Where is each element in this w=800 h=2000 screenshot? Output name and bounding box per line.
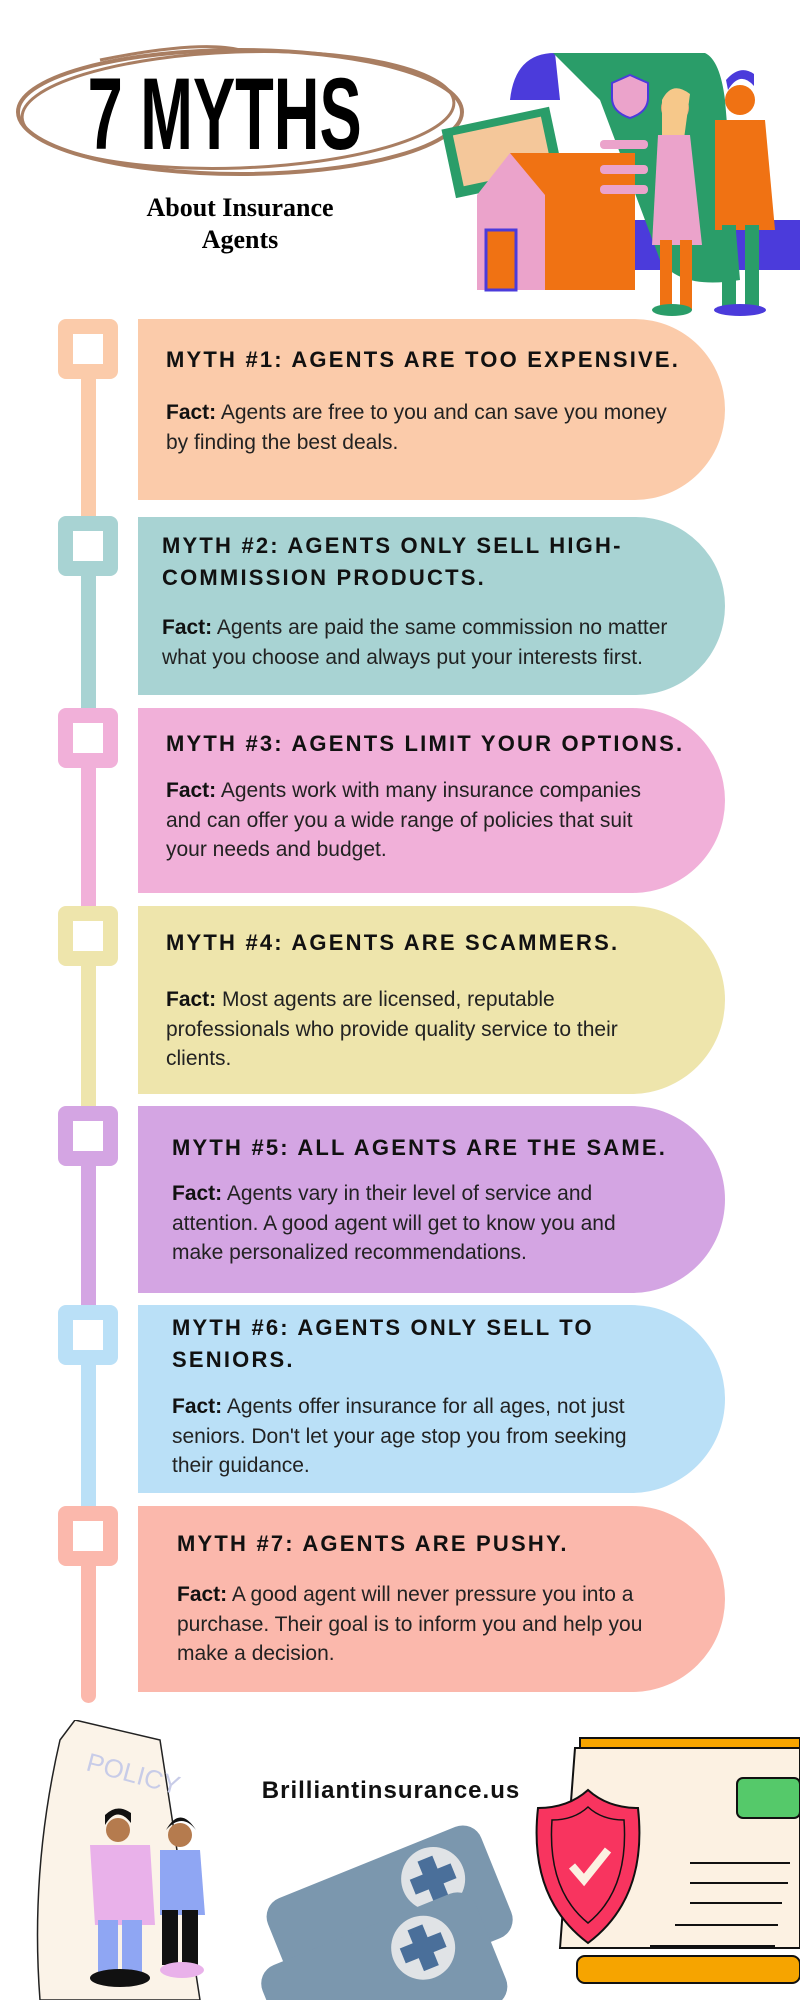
marker 3	[58, 708, 118, 768]
panel: myth 6	[138, 1305, 725, 1493]
subtitle: Agents	[202, 225, 278, 254]
illustration: shield and document	[536, 1737, 800, 1984]
panel: myth 7	[138, 1506, 725, 1692]
panel: myth 7: MYTH #7: AGENTS ARE PUSHY.	[177, 1531, 569, 1556]
title: 7 MYTHS	[88, 57, 362, 171]
panel: myth 5: Fact: Agents vary in their level of service and attention. A good agent will get to know you and make personalized recommendations.	[172, 1182, 616, 1264]
panel: myth 1: MYTH #1: AGENTS ARE TOO EXPENSIVE.	[166, 347, 680, 372]
panel: myth 4	[138, 906, 725, 1094]
panel: myth 3: MYTH #3: AGENTS LIMIT YOUR OPTIONS.	[166, 731, 684, 756]
illustration: house and handshake	[442, 53, 800, 316]
illustration: policy and people	[36, 1720, 205, 2000]
panel: myth 2	[138, 517, 725, 695]
marker 7	[58, 1506, 118, 1566]
panel: myth 6: MYTH #6: AGENTS ONLY SELL TO SENIORS.	[172, 1315, 594, 1372]
panel: myth 2: Fact: Agents are paid the same commission no matter what you choose and always put your interests first.	[162, 616, 667, 668]
illustration: policy and people: POLICY	[83, 1747, 183, 1800]
marker 4	[58, 906, 118, 966]
subtitle: About Insurance	[146, 193, 334, 222]
subtitle	[146, 193, 334, 254]
marker 2	[58, 516, 118, 576]
timeline stems	[81, 370, 96, 520]
panel: myth 3: Fact: Agents work with many insurance companies and can offer you a wide range of policies that suit your needs and budget.	[166, 779, 641, 861]
marker 6	[58, 1305, 118, 1365]
panel: myth 7: Fact: A good agent will never pressure you into a purchase. Their goal is to inform you and help you make a decision.	[177, 1583, 642, 1665]
panel: myth 4: Fact: Most agents are licensed, reputable professionals who provide quality service to their clients.	[166, 988, 618, 1070]
title ellipse	[16, 45, 464, 176]
website: Brilliantinsurance.us	[262, 1777, 520, 1804]
panel: myth 5	[138, 1106, 725, 1293]
panel: myth 1: Fact: Agents are free to you and can save you money by finding the best deals.	[166, 401, 667, 454]
panel: myth 4: MYTH #4: AGENTS ARE SCAMMERS.	[166, 930, 619, 955]
marker 1	[58, 319, 118, 379]
illustration: insurance cards	[261, 1826, 513, 2000]
panel: myth 6: Fact: Agents offer insurance for all ages, not just seniors. Don't let your age stop you from seeking their guidance.	[172, 1395, 627, 1477]
panel: myth 5: MYTH #5: ALL AGENTS ARE THE SAME.	[172, 1135, 667, 1160]
marker 5	[58, 1106, 118, 1166]
panel: myth 1	[138, 319, 725, 500]
panel: myth 3	[138, 708, 725, 893]
panel: myth 2: MYTH #2: AGENTS ONLY SELL HIGH-COMMISSION PRODUCTS.	[162, 533, 623, 590]
